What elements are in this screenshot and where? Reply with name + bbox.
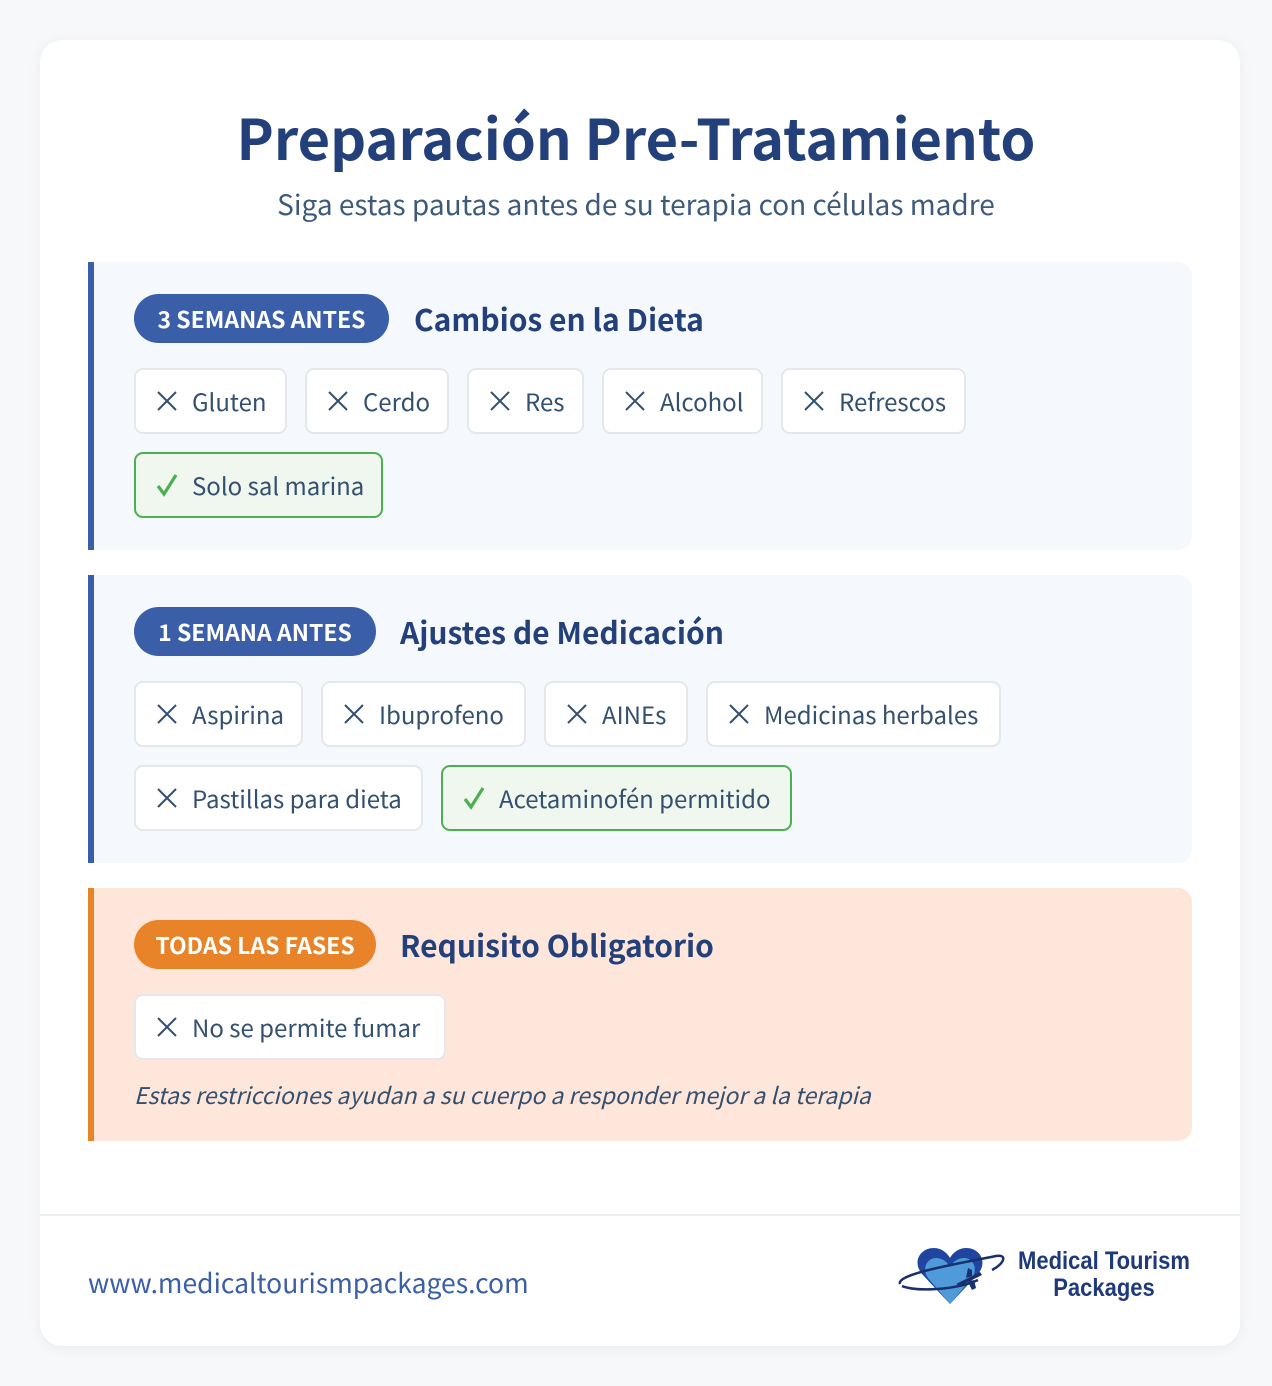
panel: diet xyxy=(88,262,1192,550)
badge: 3 semanas: 3 SEMANAS ANTES xyxy=(157,301,366,335)
chips row 1: Res xyxy=(525,383,565,418)
chip: allowed salt: Solo sal marina xyxy=(192,467,364,502)
heading: mandatory: Requisito Obligatorio xyxy=(400,922,714,966)
badge: 3 semanas xyxy=(134,294,389,343)
logo text: Medical Tourism xyxy=(1018,1247,1190,1275)
panel: mandatory xyxy=(88,888,1192,1141)
note: Estas restricciones ayudan a su cuerpo a responder mejor a la terapia xyxy=(134,1077,871,1111)
badge: todas las fases: TODAS LAS FASES xyxy=(155,927,355,961)
chip: no smoking: No se permite fumar xyxy=(192,1009,420,1044)
chips row 1: Cerdo xyxy=(363,383,430,418)
badge: 1 semana xyxy=(134,607,376,656)
chips row 2: Acetaminofén permitido xyxy=(499,780,771,815)
chips row 1: AINEs xyxy=(602,696,666,731)
chips row 1: Refrescos xyxy=(839,383,946,418)
heading: diet: Cambios en la Dieta xyxy=(414,296,704,340)
chips row 1: Alcohol xyxy=(660,383,744,418)
logo text xyxy=(1018,1247,1190,1302)
chips row 1: Gluten xyxy=(192,383,267,418)
title: Preparación Pre-Tratamiento xyxy=(237,96,1035,177)
badge: 1 semana: 1 SEMANA ANTES xyxy=(158,614,352,648)
heading: medication: Ajustes de Medicación xyxy=(400,609,724,653)
footer url: www.medicaltourismpackages.com xyxy=(88,1262,529,1301)
chips row 1: Aspirina xyxy=(192,696,284,731)
chips row 2 xyxy=(134,765,792,831)
panel: medication xyxy=(88,575,1192,863)
logo xyxy=(898,1247,1190,1304)
chip: allowed salt xyxy=(134,452,383,518)
chips row 1: Ibuprofeno xyxy=(379,696,504,731)
chips row 1 xyxy=(134,368,966,434)
logo text: Packages xyxy=(1053,1274,1155,1302)
subtitle: Siga estas pautas antes de su terapia con células madre xyxy=(277,184,995,224)
chip: no smoking xyxy=(134,994,446,1060)
chips row 1: Medicinas herbales xyxy=(764,696,978,731)
badge: todas las fases xyxy=(134,920,376,969)
icon: heart with plane xyxy=(898,1248,1004,1304)
chips row 1 xyxy=(134,681,1001,747)
chips row 2: Pastillas para dieta xyxy=(192,780,402,815)
